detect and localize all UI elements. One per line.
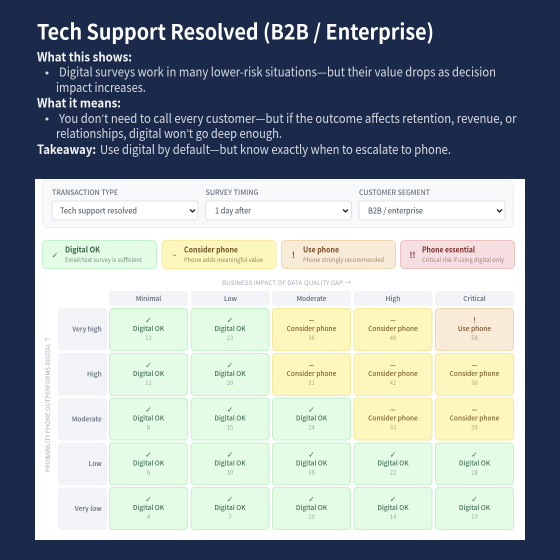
row: low: ✓	[390, 450, 396, 460]
row: very high: Use phone	[458, 323, 491, 333]
legend: consider phone: Phone adds meaningful value	[184, 255, 264, 264]
row headers: Very high	[71, 324, 102, 334]
row: high: 50	[471, 378, 478, 387]
row headers: Very low	[74, 503, 102, 513]
row: moderate: 8	[147, 422, 150, 432]
row: very low: ✓	[390, 495, 396, 504]
row: very high: 58	[471, 333, 478, 342]
row: high: 20	[227, 378, 233, 387]
row: very low: ✓	[227, 495, 233, 504]
filter: transaction type	[52, 188, 198, 220]
row: moderate: ✓	[308, 406, 315, 414]
row: low: Digital OK	[377, 458, 409, 468]
legend: use phone: Use phone	[303, 244, 339, 256]
row: moderate: Digital OK	[296, 412, 328, 422]
row: moderate: ~	[471, 406, 478, 414]
row: very low	[110, 488, 514, 530]
row: high: ~	[308, 361, 315, 370]
row: very high: Consider phone	[368, 323, 418, 333]
row: low: ✓	[145, 450, 152, 460]
row: moderate: 24	[308, 422, 315, 432]
filter: customer segment: B2B / enterprise	[368, 204, 423, 216]
row: low: 16	[308, 468, 315, 476]
heading: what this shows: What this shows:	[37, 48, 132, 66]
row: high: Digital OK	[133, 368, 165, 378]
row: very low: ✓	[471, 495, 478, 504]
row: high: Digital OK	[214, 368, 246, 378]
row: very low: Digital OK	[133, 502, 165, 512]
row: very high: !	[473, 316, 476, 325]
row: moderate: Digital OK	[214, 412, 246, 422]
row: very high: ~	[308, 316, 315, 325]
heading: what it means: What it means:	[37, 94, 121, 112]
filter: customer segment	[359, 188, 505, 220]
axis title: business impact: BUSINESS IMPACT OF DATA QUALITY GAP →	[222, 278, 351, 287]
filter: transaction type: Tech support resolved	[60, 204, 137, 216]
row: very high: 23	[227, 333, 233, 342]
row: very low: 10	[308, 512, 315, 521]
row: high: 31	[308, 378, 315, 387]
legend: use phone: !	[292, 250, 295, 261]
row headers: Low	[89, 458, 102, 468]
row: very high: 13	[145, 333, 152, 342]
bullet: what it means: You don’t need to call every customer—but if the outcome affects retention, revenue, or	[58, 109, 517, 127]
bullet: what it means	[46, 109, 517, 142]
row headers	[58, 308, 107, 530]
column headers: Low	[224, 293, 238, 303]
filter: survey timing: SURVEY TIMING	[206, 188, 259, 198]
row headers: Moderate	[72, 414, 102, 424]
legend: phone essential: Phone essential	[422, 244, 475, 256]
row: very high: Digital OK	[214, 323, 246, 333]
row: very high: 49	[390, 333, 396, 342]
row: low: Digital OK	[214, 458, 246, 468]
column headers: Moderate	[297, 293, 327, 303]
filter: transaction type: TRANSACTION TYPE	[52, 188, 118, 198]
row: very low: Digital OK	[459, 502, 491, 512]
text block: explanation	[37, 48, 517, 158]
row: high: ✓	[227, 361, 233, 370]
row: high: Consider phone	[450, 368, 500, 378]
filter: customer segment: CUSTOMER SEGMENT	[359, 188, 431, 198]
filter: survey timing	[206, 188, 352, 220]
row: low: 28	[471, 468, 478, 476]
row: moderate: ✓	[145, 406, 152, 414]
legend: phone essential: !!	[410, 250, 415, 261]
row: low: ✓	[227, 450, 233, 460]
column headers: Critical	[463, 293, 486, 303]
row: moderate: Consider phone	[450, 412, 500, 422]
row: moderate: ~	[390, 406, 396, 414]
row: very high: ~	[390, 316, 396, 325]
row: low: Digital OK	[459, 458, 491, 468]
legend: digital ok: ✓	[52, 251, 58, 260]
row: moderate: ✓	[227, 406, 233, 414]
legend: consider phone: ~	[172, 250, 177, 261]
column headers: Minimal	[136, 293, 161, 303]
row: very low: 14	[390, 512, 397, 521]
row: very low: Digital OK	[296, 502, 328, 512]
column headers	[109, 291, 514, 306]
row: low: Digital OK	[133, 458, 165, 468]
row: very low: ✓	[145, 495, 152, 504]
takeaway: Use digital by default—but know exactly when to escalate to phone.	[100, 140, 451, 158]
row: very low: Digital OK	[214, 502, 246, 512]
row: very high: 36	[308, 333, 315, 342]
row: high: Consider phone	[287, 368, 337, 378]
legend: digital ok	[42, 240, 156, 268]
row: high: ✓	[145, 361, 152, 370]
row: low	[110, 443, 514, 485]
legend: phone essential	[400, 240, 514, 268]
bullet: what this shows: Digital surveys work in many lower-risk situations—but their value drops as decision	[59, 63, 496, 81]
row: very high: ✓	[145, 316, 152, 325]
axis title: probability: PROBABILITY PHONE OUTPERFORMS DIGITAL ↑	[43, 336, 52, 472]
legend: use phone: Phone strongly recommended	[303, 255, 384, 264]
row: low: Digital OK	[296, 458, 328, 468]
legend: use phone	[282, 240, 396, 268]
bullet: what this shows	[46, 63, 496, 96]
row: high: 42	[390, 378, 396, 387]
row: high	[110, 354, 514, 396]
row headers: High	[87, 368, 102, 378]
legend	[42, 240, 514, 268]
row: very low: 7	[228, 512, 232, 521]
row: very low: ✓	[308, 495, 315, 504]
bullet: what it means: relationships, digital won’t go deep enough.	[56, 124, 282, 142]
title: Tech Support Resolved (B2B / Enterprise)	[37, 16, 434, 46]
row: moderate: 39	[471, 422, 478, 432]
filter: survey timing: 1 day after	[215, 204, 252, 216]
row: low: 6	[147, 468, 150, 476]
row: low: 22	[390, 468, 396, 476]
bullet: what this shows: impact increases.	[56, 78, 146, 96]
legend: digital ok: Email/text survey is sufficient	[65, 255, 143, 264]
row: very high	[110, 308, 514, 350]
panel: decision tool	[35, 179, 525, 540]
legend: digital ok: Digital OK	[65, 244, 101, 256]
row: very low: 4	[147, 512, 151, 521]
row: high: ~	[471, 361, 478, 370]
takeaway: Takeaway:	[37, 140, 96, 158]
row: moderate: 33	[390, 422, 396, 432]
row: very high: Consider phone	[287, 323, 337, 333]
row: moderate: 15	[227, 422, 233, 432]
row: moderate	[110, 398, 514, 440]
row: high: ~	[390, 361, 396, 370]
row: low: ✓	[308, 450, 315, 460]
row: very low: 17	[471, 512, 478, 521]
row: very high: Digital OK	[133, 323, 165, 333]
row: high: 11	[145, 378, 152, 387]
row: high: Consider phone	[368, 368, 418, 378]
row: very high: ✓	[227, 316, 233, 325]
column headers: High	[386, 293, 400, 303]
legend: consider phone: Consider phone	[184, 244, 238, 256]
row: moderate: Digital OK	[133, 412, 165, 422]
heatmap grid	[110, 308, 514, 530]
panel: filters	[42, 180, 514, 228]
row: moderate: Consider phone	[368, 412, 418, 422]
row: low: ✓	[471, 450, 478, 460]
legend: phone essential: Critical risk if using digital only	[422, 255, 505, 264]
legend: consider phone	[162, 240, 276, 268]
row: low: 10	[227, 468, 233, 476]
row: very low: Digital OK	[377, 502, 409, 512]
